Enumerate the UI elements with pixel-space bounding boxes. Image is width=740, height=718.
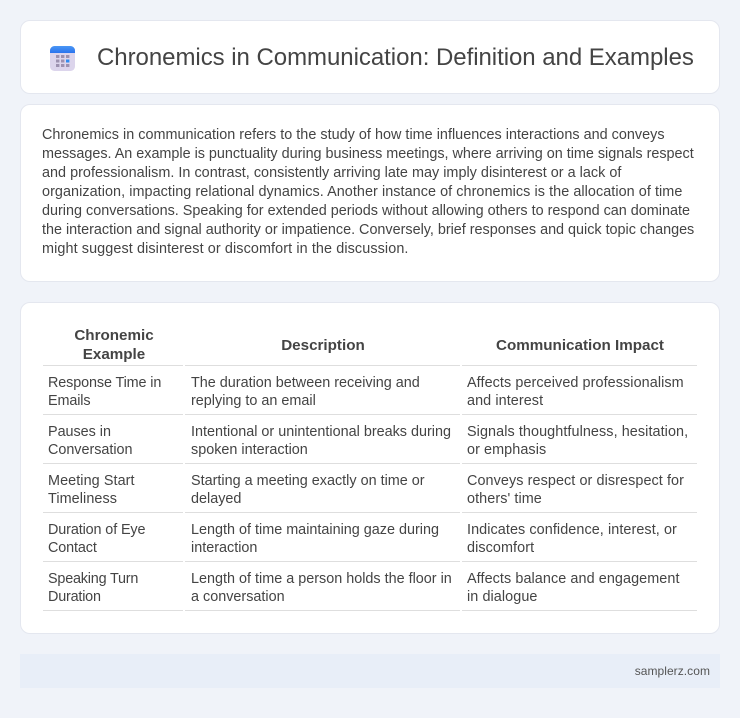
row: response time: Emails bbox=[48, 393, 90, 409]
intro paragraph bbox=[42, 127, 694, 257]
row: pauses: Pauses in bbox=[48, 424, 111, 440]
row: speaking turn: Length of time a person holds the floor in bbox=[191, 571, 452, 587]
intro paragraph: during conversations. Speaking for extended periods without allowing others to respond can dominate bbox=[42, 203, 690, 219]
intro paragraph: messages. An example is punctuality during business meetings, where arriving on time signals respect bbox=[42, 146, 694, 162]
row: eye contact: interaction bbox=[191, 540, 257, 556]
panel: introduction text bbox=[20, 104, 720, 282]
row: meeting start: Meeting Start bbox=[48, 473, 135, 489]
column heading: communication impact: Communication Impact bbox=[496, 337, 664, 354]
row: response time: replying to an email bbox=[191, 393, 316, 409]
row: eye contact: Indicates confidence, interest, or bbox=[467, 522, 677, 538]
row: meeting start: others' time bbox=[467, 491, 542, 507]
column heading: description: Description bbox=[281, 337, 365, 354]
intro paragraph: the interaction and signal authority or impatience. Conversely, brief responses and quick topic changes bbox=[42, 222, 694, 238]
intro paragraph: Chronemics in communication refers to the study of how time influences interactions and conveys bbox=[42, 127, 665, 143]
row: meeting start bbox=[48, 473, 684, 507]
row: speaking turn: Speaking Turn bbox=[48, 571, 138, 587]
row: speaking turn: in dialogue bbox=[467, 589, 538, 605]
row: response time bbox=[48, 375, 684, 409]
row: pauses: spoken interaction bbox=[191, 442, 308, 458]
intro paragraph: and professionalism. In contrast, consistently arriving late may imply disinterest or a lack of bbox=[42, 165, 621, 181]
intro paragraph: might suggest disinterest or discomfort in the discussion. bbox=[42, 241, 409, 257]
column heading: chronemic example: Chronemic bbox=[74, 327, 154, 344]
panel: chronemic table bbox=[20, 302, 720, 634]
footer source: samplerz.com bbox=[635, 664, 710, 678]
row: speaking turn: a conversation bbox=[191, 589, 285, 605]
row: pauses: Intentional or unintentional breaks during bbox=[191, 424, 451, 440]
row: eye contact: Duration of Eye bbox=[48, 522, 145, 538]
intro paragraph: organization, impacting relational dynamics. Another instance of chronemics is the allocation of time bbox=[42, 184, 682, 200]
title: Chronemics in Communication: Definition and Examples bbox=[97, 44, 694, 71]
row: meeting start: delayed bbox=[191, 491, 241, 507]
column heading: chronemic example bbox=[74, 327, 154, 363]
row: eye contact bbox=[48, 522, 677, 556]
row: meeting start: Starting a meeting exactly on time or bbox=[191, 473, 425, 489]
row: pauses: or emphasis bbox=[467, 442, 546, 458]
row: response time: and interest bbox=[467, 393, 543, 409]
row: eye contact: Contact bbox=[48, 540, 97, 556]
row: response time: Affects perceived professionalism bbox=[467, 375, 684, 391]
row: speaking turn bbox=[48, 571, 680, 605]
row: response time: Response Time in bbox=[48, 375, 161, 391]
icon: calendar bbox=[50, 46, 75, 71]
table header bbox=[74, 327, 664, 363]
row: response time: The duration between receiving and bbox=[191, 375, 420, 391]
row: meeting start: Timeliness bbox=[48, 491, 117, 507]
row: pauses bbox=[48, 424, 688, 458]
row: speaking turn: Duration bbox=[48, 589, 101, 605]
column heading: chronemic example: Example bbox=[83, 346, 145, 363]
row: eye contact: Length of time maintaining gaze during bbox=[191, 522, 439, 538]
footer bar bbox=[20, 654, 720, 688]
header panel bbox=[20, 20, 720, 94]
row: meeting start: Conveys respect or disrespect for bbox=[467, 473, 684, 489]
row: pauses: Signals thoughtfulness, hesitation, bbox=[467, 424, 688, 440]
row: pauses: Conversation bbox=[48, 442, 132, 458]
row: speaking turn: Affects balance and engagement bbox=[467, 571, 680, 587]
row: eye contact: discomfort bbox=[467, 540, 534, 556]
